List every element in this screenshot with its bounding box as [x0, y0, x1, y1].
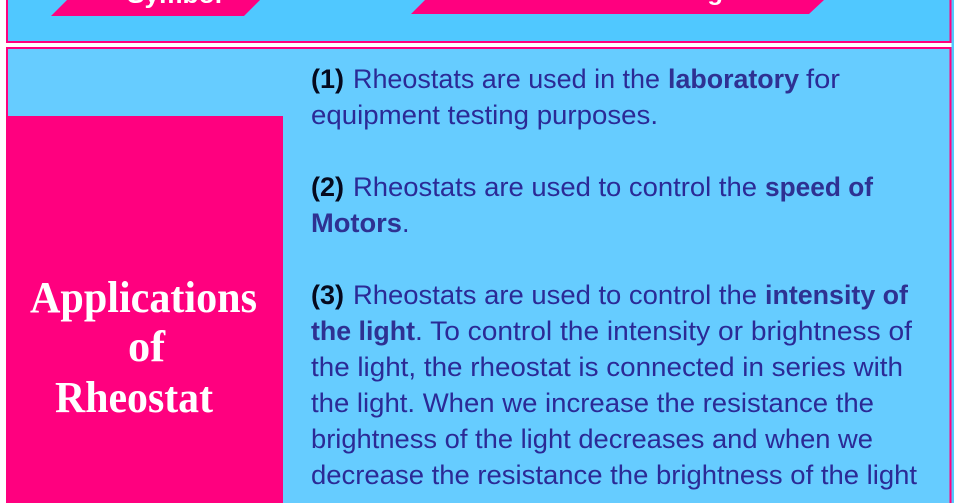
text: application 1: (1): [311, 64, 344, 94]
text: application 2: speed of: [765, 172, 874, 202]
text: application 2: (2): [311, 172, 344, 202]
text: application 1: [311, 64, 840, 130]
text: application 1: laboratory: [668, 64, 799, 94]
text: application 3: decrease the resistance the brightness of the light: [311, 460, 918, 490]
symbol banner: [51, 0, 260, 16]
text: application 3: the light. When we increase the resistance the: [311, 388, 874, 418]
text: application 2: Rheostats are used to control the: [353, 172, 757, 202]
working banner: [411, 0, 824, 14]
text: application 3: intensity of: [765, 280, 909, 310]
text: application 3: . To control the intensity or brightness of: [415, 316, 913, 346]
text: application 3: the light, the rheostat is connected in series with: [311, 352, 903, 382]
text: application 1: Rheostats are used in the: [353, 64, 660, 94]
text: application 3: [311, 280, 918, 490]
heading block: applications of rheostat: [6, 116, 283, 503]
panel: top section: [7, 0, 950, 42]
text: application 3: the light: [311, 316, 415, 346]
heading block: applications of rheostat: of: [128, 322, 166, 371]
heading block: applications of rheostat: Applications: [30, 273, 257, 322]
text: application 3: (3): [311, 280, 344, 310]
text: application 3: Rheostats are used to control the: [353, 280, 757, 310]
text: application 1: equipment testing purposes.: [311, 100, 658, 130]
text: application 2: [311, 172, 874, 238]
text: application 2: Motors: [311, 208, 402, 238]
text: application 2: .: [402, 208, 410, 238]
text: application 1: for: [806, 64, 840, 94]
text: application 3: brightness of the light decreases and when we: [311, 424, 873, 454]
heading block: applications of rheostat: Rheostat: [55, 373, 213, 422]
